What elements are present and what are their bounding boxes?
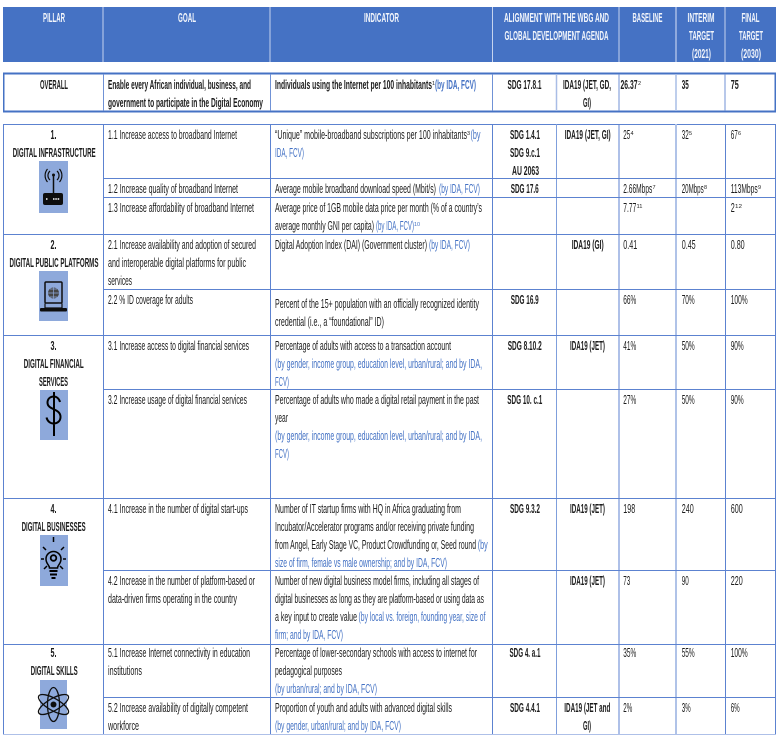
row 2.2: 70%	[682, 293, 695, 307]
row 2.2: credential (i.e., a “foundational” ID)	[275, 315, 384, 329]
overall indicator: 1	[432, 81, 435, 87]
panel: pillar 5 digital skills	[31, 646, 748, 733]
heading: interim target: TARGET	[689, 29, 714, 43]
row 4.1: IDA19 (JET)	[570, 502, 605, 516]
heading: interim target: INTERIM	[688, 11, 714, 25]
panel: overall row: OVERALL	[40, 78, 68, 92]
row 4.1: 198	[623, 502, 635, 516]
row 5.2: SDG 4.4.1	[510, 701, 540, 715]
row 4.2: firm; and by IDA, FCV)	[275, 628, 343, 642]
row 3.1: FCV)	[275, 375, 289, 389]
row 1.2: (by IDA, FCV)	[439, 182, 480, 196]
row 3.2: 3.2 Increase usage of digital financial services	[108, 393, 247, 407]
row 4.1: 4.1 Increase in the number of digital start-ups	[108, 502, 248, 516]
row 2.2: 100%	[731, 293, 748, 307]
pillar 2 title: 2.	[50, 238, 56, 252]
row 1.2: 2.66Mbps	[623, 182, 652, 196]
heading: alignment	[504, 11, 609, 43]
row 2.1: 0.41	[623, 238, 637, 252]
row 1.1: 6	[738, 131, 741, 137]
row 2.1: 0.80	[731, 238, 745, 252]
row 1.3: 2	[731, 201, 735, 215]
row 1.1: 4	[630, 131, 634, 137]
row 4.2: data-driven firms operating in the country	[108, 592, 237, 606]
panel: pillar 5 digital skills: 6%	[731, 701, 740, 715]
pillar 3 title: SERVICES	[39, 375, 68, 389]
panel: pillar 2 digital public platforms: DIGITAL PUBLIC PLATFORMS	[10, 256, 98, 270]
heading: final target: FINAL	[742, 11, 760, 25]
row 3.1: 90%	[731, 339, 744, 353]
row 1.2: 113Mbps	[731, 182, 758, 196]
row 1.1: SDG 1.4.1	[510, 128, 540, 142]
row 1.3: 7.77	[623, 201, 636, 215]
row 5.1: 35%	[623, 646, 636, 660]
row 5.2: IDA19 (JET and	[564, 701, 610, 715]
pillar 3 title: DIGITAL FINANCIAL	[24, 357, 84, 371]
row 2.1: 2.1 Increase availability and adoption of secured	[108, 238, 256, 252]
row 1.1: “Unique” mobile-broadband subscriptions per 100 inhabitants	[275, 128, 467, 142]
row 3.2: 27%	[623, 393, 636, 407]
overall goal: government to participate in the Digital Economy	[108, 96, 263, 110]
row 1.2: 7	[652, 185, 656, 191]
overall values: 75	[731, 78, 739, 92]
pillar 4 title	[22, 502, 86, 534]
overall goal: Enable every African individual, business, and	[108, 78, 251, 92]
row 5.1	[108, 646, 748, 696]
heading: interim target: (2021)	[692, 47, 711, 61]
heading: alignment: ALIGNMENT WITH THE WBG AND	[504, 11, 609, 25]
icon: wireless router	[39, 161, 68, 213]
row 1.1: 25	[623, 128, 630, 142]
row 3.1	[108, 339, 744, 389]
row 1.1: 32	[682, 128, 689, 142]
pillar 2 title	[10, 238, 98, 270]
pillar 5 title: 5.	[50, 646, 56, 660]
row 4.2	[108, 574, 743, 642]
row 2.1: services	[108, 274, 132, 288]
overall indicator: Individuals using the Internet per 100 inhabitants	[275, 78, 432, 92]
row 2.1: IDA19 (GI)	[572, 238, 604, 252]
row 4.2: IDA19 (JET)	[570, 574, 605, 588]
row 4.2: a key input to create value	[275, 610, 357, 624]
pillar 1 title	[13, 128, 96, 160]
row 1.1: SDG 9.c.1	[510, 146, 540, 160]
row 3.1: 50%	[682, 339, 695, 353]
row 5.1: institutions	[108, 664, 142, 678]
row 1.2: 1.2 Increase quality of broadband Internet	[108, 182, 238, 196]
row 1.1: 3	[467, 131, 470, 137]
icon: light bulb with gear	[40, 535, 68, 586]
row 5.1: pedagogical purposes	[275, 664, 342, 678]
row 2.2: 66%	[623, 293, 636, 307]
row 3.2: FCV)	[275, 447, 289, 461]
panel: overall row	[4, 74, 776, 112]
row 5.2: Proportion of youth and adults with advanced digital skills	[275, 701, 452, 715]
row 3.2: 50%	[682, 393, 695, 407]
row 4.2: (by local vs. foreign, founding year, size of	[358, 610, 486, 624]
overall values: 2	[638, 81, 641, 87]
row 1.1: 67	[731, 128, 738, 142]
row 5.2: workforce	[107, 719, 139, 733]
row 3.2: (by gender, income group, education level, urban/rural; and by IDA,	[275, 429, 482, 443]
panel: pillar 3 digital financial services	[24, 339, 744, 461]
row 1.2: 20Mbps	[682, 182, 704, 196]
row 4.2: digital businesses as long as they are platform-based or using data as	[275, 592, 484, 606]
row 1.1	[108, 128, 741, 178]
row 1.3: Average price of 1GB mobile data price per month (% of a country’s	[275, 201, 482, 215]
pillar 5 title	[31, 646, 78, 678]
row 2.2: 2.2 % ID coverage for adults	[108, 293, 193, 307]
row 2.2: Percent of the 15+ population with an officially recognized identity	[275, 297, 479, 311]
icon: dollar sign	[40, 390, 68, 440]
row 1.3: 1.3 Increase affordability of broadband Internet	[108, 201, 254, 215]
overall goal	[108, 78, 263, 110]
row 2.1: and interoperable digital platforms for public	[108, 256, 246, 270]
row 1.3: 11	[636, 204, 642, 210]
pillar 4 title: 4.	[50, 502, 56, 516]
heading: goal: GOAL	[178, 11, 196, 25]
row 2.1: Digital Adoption Index (DAI) (Government cluster)	[275, 238, 427, 252]
pillar 1 title: 1.	[50, 128, 56, 142]
row 1.1: (by	[470, 128, 481, 142]
heading: interim target	[688, 11, 714, 61]
row 1.3	[108, 201, 742, 233]
row 4.2: 220	[731, 574, 743, 588]
row 1.1: IDA19 (JET, GI)	[565, 128, 611, 142]
row 5.2	[107, 701, 740, 733]
overall alignment	[508, 78, 611, 110]
row 4.2: Number of new digital business model firms, including all stages of	[275, 574, 479, 588]
overall values	[620, 78, 739, 92]
row 3.2: year	[275, 411, 288, 425]
row 3.2: SDG 10. c.1	[507, 393, 542, 407]
row 1.2: Average mobile broadband download speed (Mbit/s)	[275, 182, 436, 196]
overall values: 35	[682, 78, 689, 92]
row 1.3: 12	[735, 204, 742, 210]
row 5.1: 55%	[682, 646, 695, 660]
row 4.1: (by	[478, 538, 488, 552]
header band: PILLAR	[43, 11, 65, 25]
row 1.1: AU 2063	[512, 164, 539, 178]
panel: pillar 5 digital skills: DIGITAL SKILLS	[31, 664, 78, 678]
row 3.2: Percentage of adults who made a digital retail payment in the past	[275, 393, 479, 407]
heading: alignment: GLOBAL DEVELOPMENT AGENDA	[504, 29, 608, 43]
row 2.2	[108, 293, 748, 329]
row 5.2: 5.2 Increase availability of digitally competent	[108, 701, 248, 715]
row 4.1: from Angel, Early Stage VC, Product Crowdfunding or, Seed round	[275, 538, 476, 552]
heading: final target	[739, 11, 763, 61]
row 2.2: SDG 16.9	[511, 293, 539, 307]
row 4.1: size of firm, female vs male ownership; and by IDA, FCV)	[275, 556, 447, 570]
row 4.1	[108, 502, 743, 570]
row 1.2: SDG 17.6	[511, 182, 539, 196]
panel: pillar 4 digital businesses	[22, 502, 743, 642]
row 3.1: 41%	[623, 339, 636, 353]
header band	[3, 7, 776, 62]
pillar 3 title: 3.	[50, 339, 56, 353]
icon: atom	[36, 680, 71, 729]
row 5.1: (by urban/rural; and by IDA, FCV)	[275, 682, 377, 696]
row 1.3: average monthly GNI per capita)	[275, 219, 374, 233]
row 2.1: (by IDA, FCV)	[429, 238, 470, 252]
row 3.2	[108, 393, 744, 461]
row 5.2: GI)	[583, 719, 591, 733]
row 1.2	[108, 182, 761, 196]
panel: pillar 4 digital businesses: DIGITAL BUSINESSES	[22, 520, 86, 534]
overall alignment: IDA19 (JET, GD,	[563, 78, 611, 92]
overall alignment: SDG 17.8.1	[508, 78, 542, 92]
row 4.1: Number of IT startup firms with HQ in Africa graduating from	[275, 502, 461, 516]
row 5.1: 5.1 Increase Internet connectivity in education	[108, 646, 250, 660]
heading: final target: (2030)	[741, 47, 761, 61]
heading: indicator: INDICATOR	[364, 11, 399, 25]
panel: pillar 1 digital infrastructure	[13, 128, 761, 233]
row 1.1: 1.1 Increase access to broadband Internet	[108, 128, 237, 142]
panel: pillar 2 digital public platforms	[10, 238, 748, 329]
overall values: 26.37	[620, 78, 638, 92]
overall indicator: (by IDA, FCV)	[435, 78, 476, 92]
row 5.1: 100%	[731, 646, 748, 660]
row 5.2: 3%	[682, 701, 691, 715]
row 2.1: 0.45	[682, 238, 696, 252]
row 3.1: IDA19 (JET)	[570, 339, 605, 353]
row 4.2: 90	[682, 574, 689, 588]
row 5.1: SDG 4. a.1	[510, 646, 541, 660]
row 4.1: SDG 9.3.2	[510, 502, 540, 516]
row 5.2: (by gender, urban/rural; and by IDA, FCV)	[275, 719, 401, 733]
row 3.1: 3.1 Increase access to digital financial services	[108, 339, 249, 353]
row 1.3: (by IDA, FCV)	[376, 219, 414, 233]
row 1.2: 9	[758, 185, 761, 191]
header band: BASELINE	[632, 11, 662, 25]
row 3.2: 90%	[731, 393, 744, 407]
icon: laptop with globe	[39, 271, 68, 321]
panel: pillar 1 digital infrastructure: DIGITAL INFRASTRUCTURE	[13, 146, 96, 160]
row 3.1: Percentage of adults with access to a transaction account	[275, 339, 451, 353]
row 4.1: Incubator/Accelerator programs and/or receiving private funding	[275, 520, 474, 534]
row 1.3: 10	[414, 222, 420, 228]
row 2.1	[108, 238, 745, 288]
pillar 3 title	[24, 339, 84, 389]
row 5.1: Percentage of lower-secondary schools with access to internet for	[275, 646, 477, 660]
row 3.1: (by gender, income group, education level, urban/rural; and by IDA,	[275, 357, 482, 371]
row 4.2: 73	[623, 574, 630, 588]
overall alignment: GI)	[583, 96, 591, 110]
row 4.2: 4.2 Increase in the number of platform-based or	[108, 574, 255, 588]
overall indicator	[275, 78, 476, 92]
row 1.1: IDA, FCV)	[275, 146, 304, 160]
row 1.2: 8	[704, 185, 707, 191]
row 1.1: 5	[689, 131, 692, 137]
row 4.1: 600	[731, 502, 743, 516]
row 3.1: SDG 8.10.2	[508, 339, 542, 353]
row 5.2: 2%	[623, 701, 632, 715]
row 4.1: 240	[682, 502, 694, 516]
